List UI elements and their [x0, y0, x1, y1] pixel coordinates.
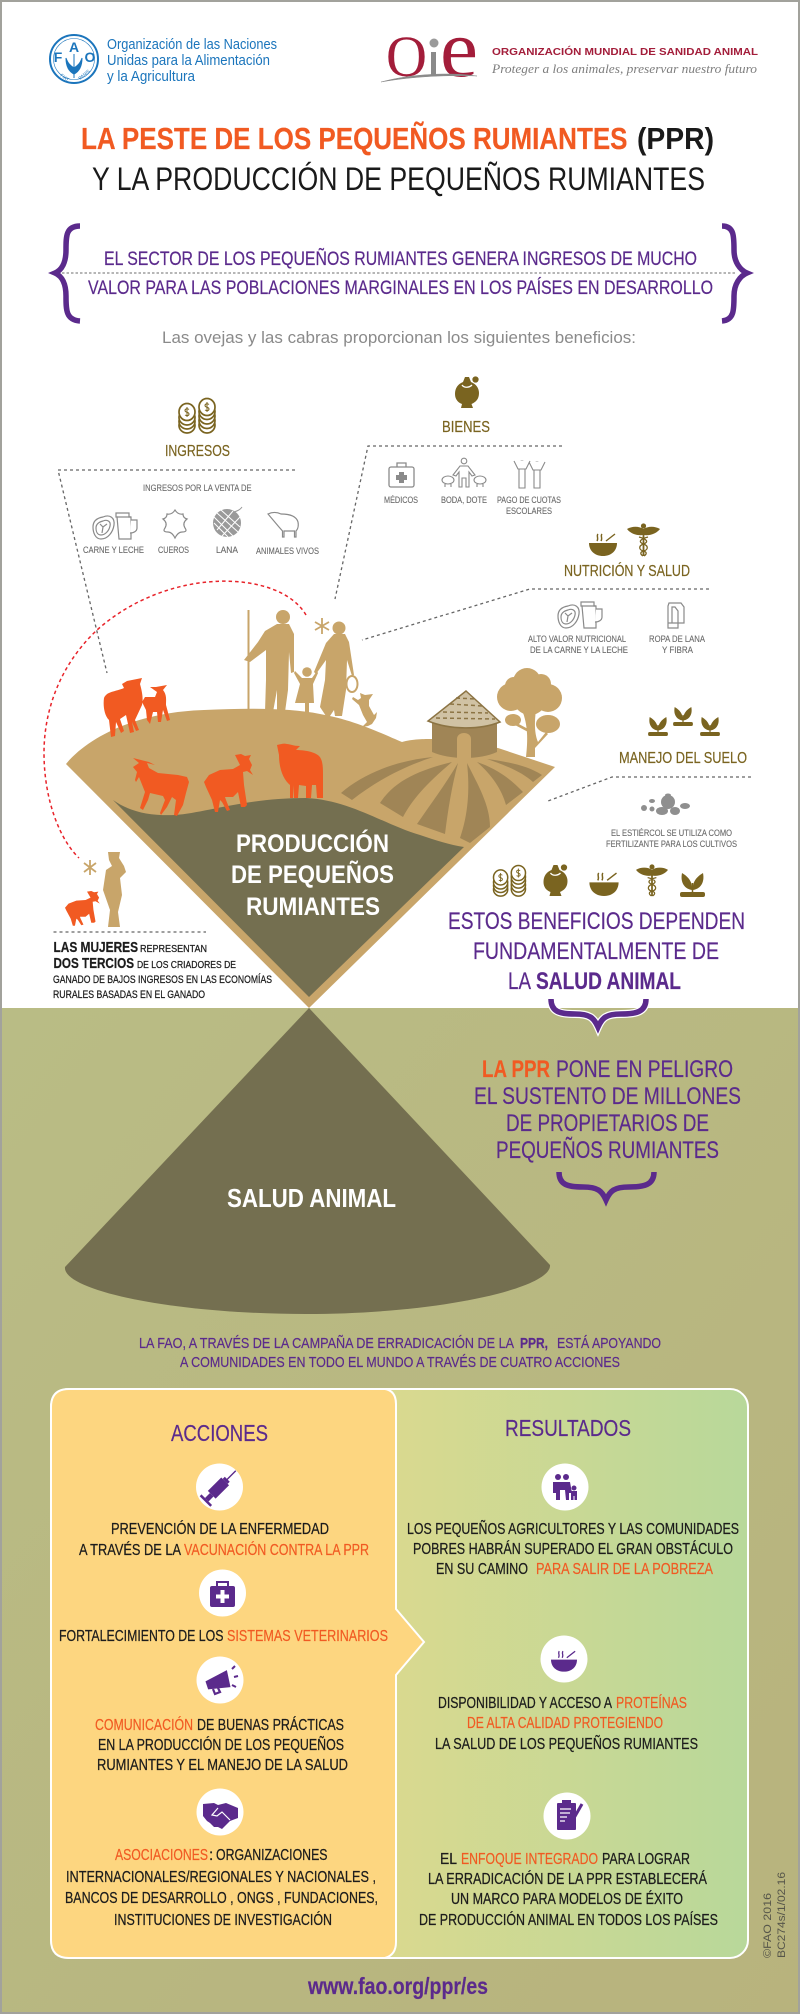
- production label: DE PEQUEÑOS: [231, 859, 394, 889]
- women statistic: [53, 939, 272, 1001]
- olive lower background: [0, 1008, 800, 2014]
- leader line: [335, 446, 562, 599]
- goods labels: [384, 495, 561, 516]
- purple brace under threat: [559, 1172, 654, 1200]
- women statistic: RURALES BASADAS EN EL GANADO: [53, 989, 205, 1001]
- orange animals on hill: [104, 678, 323, 816]
- nutrition labels: DE LA CARNE Y LA LECHE: [530, 645, 628, 655]
- OIE logo: [381, 3, 478, 94]
- action 1 text: [79, 1521, 369, 1559]
- panel: results: [407, 1415, 739, 1929]
- OIE logo: e: [440, 3, 478, 94]
- FAO campaign sentence: A COMUNIDADES EN TODO EL MUNDO A TRAVÉS DE CUATRO ACCIONES: [180, 1354, 620, 1371]
- FAO campaign sentence: [139, 1335, 661, 1371]
- action 3 text: [95, 1717, 348, 1774]
- large sheep: [104, 678, 143, 737]
- purple brace under statement: [551, 999, 646, 1027]
- OIE organisation name and motto: ORGANIZACIÓN MUNDIAL DE SANIDAD ANIMAL: [492, 45, 759, 58]
- statement: PPR threat: PONE EN PELIGRO: [556, 1056, 733, 1083]
- women statistic: LAS MUJERES: [54, 939, 138, 956]
- result 1 text: POBRES HABRÁN SUPERADO EL GRAN OBSTÁCULO: [413, 1541, 733, 1558]
- statement: PPR threat: LA PPR: [482, 1056, 550, 1083]
- icon: wool: [213, 507, 242, 537]
- website: www.fao.org/ppr/es: [307, 1973, 488, 1999]
- people: [244, 610, 377, 727]
- action 4 text: INTERNACIONALES/REGIONALES Y NACIONALES ,: [66, 1869, 376, 1886]
- statement: benefits depend on animal health: LA: [508, 968, 531, 995]
- result 1 text: EN SU CAMINO: [436, 1561, 528, 1578]
- panel: actions background: [51, 1389, 424, 1958]
- panel: nutrición y salud: [362, 523, 709, 655]
- result 3 text: [419, 1851, 718, 1929]
- tree: [497, 668, 562, 757]
- panel: women caption: [53, 852, 272, 1001]
- FAO logo: [50, 35, 98, 83]
- FAO campaign sentence: PPR,: [520, 1335, 548, 1352]
- statement: benefits depend on animal health: FUNDAMENTALMENTE DE: [473, 938, 719, 965]
- statement: PPR threat: DE PROPIETARIOS DE: [506, 1110, 709, 1137]
- icon: meat and milk: [93, 513, 137, 539]
- FAO logo: A: [69, 39, 79, 55]
- action 3 text: EN LA PRODUCCIÓN DE LOS PEQUEÑOS: [98, 1737, 344, 1754]
- icon: live sheep: [268, 512, 298, 537]
- goat facing right: [204, 754, 253, 812]
- action 1 text: A TRAVÉS DE LA: [79, 1542, 182, 1559]
- icon: caduceus: [627, 523, 660, 556]
- asterisk: [84, 860, 96, 875]
- icon: bowl: [589, 534, 617, 556]
- title: (PPR): [637, 122, 714, 156]
- icon: coins: [179, 398, 215, 433]
- icon: scarf: [668, 603, 684, 628]
- action 4 text: :: [209, 1847, 213, 1864]
- result 3 text: LA ERRADICACIÓN DE LA PPR ESTABLECERÁ: [428, 1871, 708, 1888]
- icons: seedlings: [648, 717, 668, 736]
- result 2 text: DISPONIBILIDAD Y ACCESO A: [438, 1695, 613, 1712]
- result 3 text: EL: [440, 1851, 457, 1868]
- panel: bienes: [335, 376, 562, 599]
- intro statement: EL SECTOR DE LOS PEQUEÑOS RUMIANTES GENERA INGRESOS DE MUCHO: [104, 248, 697, 270]
- asterisk: [315, 618, 329, 634]
- FAO logo: O: [85, 49, 96, 65]
- goods labels: PAGO DE CUOTAS: [497, 495, 561, 505]
- statement: PPR threat: [474, 1056, 741, 1164]
- icon: wedding dowry: [442, 458, 486, 487]
- icon: manure: [641, 794, 690, 815]
- production label: RUMIANTES: [246, 893, 380, 921]
- heading: ingresos: INGRESOS: [165, 443, 230, 460]
- sales item labels: CARNE Y LECHE: [83, 545, 144, 555]
- action 2 text: FORTALECIMIENTO DE LOS: [59, 1628, 224, 1645]
- sales item labels: CUEROS: [158, 545, 189, 555]
- FAO campaign sentence: LA FAO, A TRAVÉS DE LA CAMPAÑA DE ERRADICACIÓN DE LA: [139, 1335, 514, 1352]
- icon: vet kit: [199, 1570, 246, 1616]
- statement: benefits depend on animal health: [448, 908, 745, 995]
- OIE organisation name and motto: Proteger a los animales, preservar nuestro futuro: [491, 61, 758, 76]
- leader line: [548, 777, 751, 801]
- FAO campaign sentence: ESTÁ APOYANDO: [557, 1335, 661, 1352]
- nutrition labels: ALTO VALOR NUTRICIONAL: [528, 634, 626, 644]
- goods labels: MÉDICOS: [384, 495, 418, 505]
- women statistic: REPRESENTAN: [140, 943, 207, 955]
- panel: ingresos: [58, 398, 319, 673]
- manure caption: EL ESTIÉRCOL SE UTILIZA COMO: [611, 828, 732, 838]
- action 4 text: INSTITUCIONES DE INVESTIGACIÓN: [114, 1912, 332, 1929]
- sales item labels: ANIMALES VIVOS: [256, 546, 319, 556]
- action 4 text: ASOCIACIONES: [115, 1847, 208, 1864]
- goods labels: ESCOLARES: [506, 506, 552, 516]
- FAO organisation name: Organización de las Naciones: [107, 37, 277, 53]
- action 3 text: COMUNICACIÓN: [95, 1717, 193, 1734]
- icon: megaphone: [196, 1656, 244, 1704]
- right curly brace: [722, 226, 747, 321]
- page background white: [0, 0, 800, 1008]
- result 2 text: [435, 1695, 698, 1753]
- icon: family: [542, 1464, 588, 1510]
- result 3 text: DE PRODUCCIÓN ANIMAL EN TODOS LOS PAÍSES: [419, 1912, 718, 1929]
- icon: meat and milk: [558, 602, 602, 628]
- OIE logo: O: [386, 24, 427, 89]
- title: [81, 121, 714, 197]
- production label: [231, 828, 394, 921]
- statement: benefits depend on animal health: SALUD ANIMAL: [536, 968, 681, 995]
- dog: [352, 693, 377, 727]
- icon: handshake: [196, 1788, 244, 1836]
- woman with basket: [314, 622, 358, 716]
- nutrition labels: [528, 634, 706, 655]
- action 3 text: DE BUENAS PRÁCTICAS: [197, 1717, 344, 1734]
- left curly brace: [55, 226, 80, 321]
- nutrition labels: Y FIBRA: [662, 645, 694, 655]
- tan hill and funnel: [66, 709, 555, 1008]
- copyright notice: BC274s/1/02.16: [776, 1872, 788, 1958]
- goods labels: BODA, DOTE: [441, 495, 487, 505]
- women statistic: DE LOS CRIADORES DE: [137, 959, 236, 971]
- statement: PPR threat: PEQUEÑOS RUMIANTES: [496, 1137, 719, 1164]
- nutrition labels: ROPA DE LANA: [649, 634, 706, 644]
- FAO organisation name: [107, 37, 277, 85]
- lamb: [142, 685, 170, 724]
- OIE organisation name and motto: [491, 45, 759, 76]
- FAO organisation name: Unidas para la Alimentación: [107, 53, 270, 69]
- production label: PRODUCCIÓN: [236, 828, 389, 858]
- leader line: [58, 470, 295, 673]
- sheep facing left: [277, 744, 323, 798]
- FAO logo: FIAT: [59, 73, 70, 82]
- icon: hide: [163, 510, 187, 538]
- sales caption: INGRESOS POR LA VENTA DE: [143, 483, 252, 493]
- icon: woman carrying jar: [103, 852, 126, 927]
- icon: clipboard: [544, 1792, 590, 1840]
- action 4 text: [65, 1847, 378, 1929]
- sales item labels: [83, 545, 319, 556]
- hut: [428, 691, 500, 760]
- olive funnel interior: [113, 798, 464, 997]
- women statistic: DOS TERCIOS: [54, 955, 134, 972]
- animal health cone: [65, 1008, 550, 1314]
- manure caption: FERTILIZANTE PARA LOS CULTIVOS: [606, 839, 737, 849]
- icon: syringe: [196, 1464, 243, 1510]
- title: LA PESTE DE LOS PEQUEÑOS RUMIANTES: [81, 121, 628, 156]
- panel: results background: [51, 1389, 748, 1958]
- cone label: SALUD ANIMAL: [227, 1183, 396, 1213]
- red dashed arc linking women to livelihoods: [44, 581, 306, 858]
- action 3 text: RUMIANTES Y EL MANEJO DE LA SALUD: [97, 1757, 348, 1774]
- result 1 text: PARA SALIR DE LA POBREZA: [536, 1561, 714, 1578]
- icon: goat: [65, 891, 100, 926]
- FAO organisation name: y la Agricultura: [107, 69, 196, 85]
- heading: resultados: RESULTADOS: [505, 1415, 631, 1441]
- ploughed field: [341, 757, 542, 843]
- manure caption: [606, 828, 737, 849]
- statement: PPR threat: EL SUSTENTO DE MILLONES: [474, 1083, 741, 1110]
- result 3 text: UN MARCO PARA MODELOS DE ÉXITO: [451, 1891, 683, 1908]
- heading: manejo del suelo: MANEJO DEL SUELO: [619, 750, 747, 767]
- illustration: production funnel: [66, 610, 562, 1008]
- action 1 text: PREVENCIÓN DE LA ENFERMEDAD: [111, 1521, 329, 1538]
- icon row: benefits summary: [494, 864, 705, 897]
- heading: bienes: BIENES: [442, 419, 490, 436]
- result 3 text: PARA LOGRAR: [602, 1851, 690, 1868]
- goat facing left: [133, 758, 189, 816]
- result 2 text: PROTEÍNAS: [616, 1695, 687, 1712]
- sales item labels: LANA: [216, 545, 239, 555]
- FAO logo: F: [54, 49, 63, 65]
- result 2 text: LA SALUD DE LOS PEQUEÑOS RUMIANTES: [435, 1736, 698, 1753]
- leader line: [362, 589, 709, 640]
- benefits lead-in: Las ovejas y las cabras proporcionan los siguientes beneficios:: [162, 328, 636, 347]
- heading: nutrición y salud: NUTRICIÓN Y SALUD: [564, 563, 690, 580]
- women statistic: GANADO DE BAJOS INGRESOS EN LAS ECONOMÍAS: [53, 973, 272, 986]
- icon: food bowl: [540, 1636, 588, 1682]
- man with stick: [244, 610, 294, 712]
- action 4 text: ORGANIZACIONES: [216, 1847, 328, 1864]
- result 2 text: DE ALTA CALIDAD PROTEGIENDO: [467, 1715, 663, 1732]
- result 3 text: ENFOQUE INTEGRADO: [461, 1851, 598, 1868]
- icon: jar: [455, 376, 479, 408]
- copyright notice: ©FAO 2016: [762, 1893, 774, 1958]
- panel: actions: [59, 1420, 388, 1929]
- child: [294, 667, 318, 713]
- result 1 text: [407, 1521, 739, 1578]
- FAO logo: PANIS: [77, 68, 91, 81]
- icon: medical kit: [389, 463, 414, 487]
- heading: acciones: ACCIONES: [171, 1420, 268, 1446]
- action 1 text: VACUNACIÓN CONTRA LA PPR: [184, 1542, 369, 1559]
- action 4 text: BANCOS DE DESARROLLO , ONGS , FUNDACIONES,: [65, 1890, 378, 1907]
- intro statement: [88, 248, 713, 299]
- action 2 text: [59, 1628, 388, 1645]
- panel: soil management: [548, 707, 751, 849]
- action 2 text: SISTEMAS VETERINARIOS: [227, 1628, 388, 1645]
- icon: school children: [514, 461, 545, 488]
- copyright notice: [762, 1872, 788, 1958]
